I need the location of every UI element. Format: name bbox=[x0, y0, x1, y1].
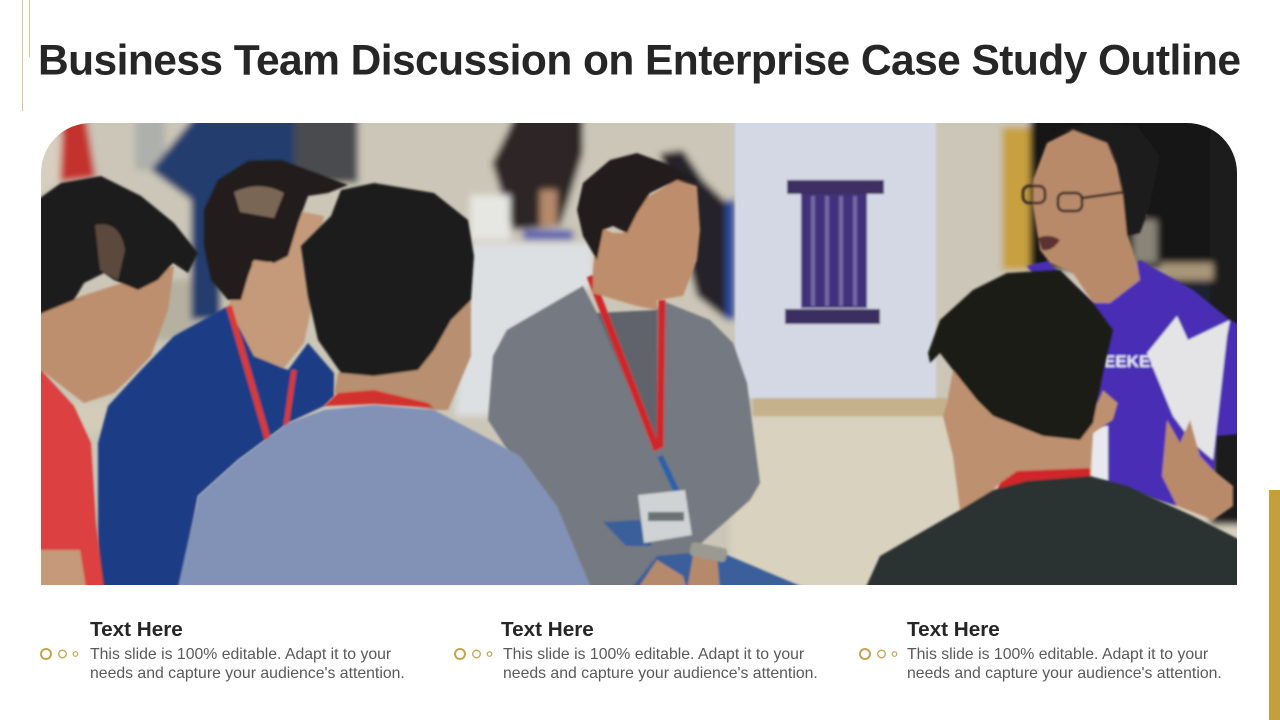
body text 3: This slide is 100% editable. Adapt it to your bbox=[907, 646, 1208, 663]
body text 2: This slide is 100% editable. Adapt it to your bbox=[503, 646, 804, 663]
man in red shirt, far left bbox=[30, 176, 198, 600]
gold accent bar on right edge bbox=[1269, 490, 1280, 720]
man in navy shirt with red lanyard, left bbox=[98, 160, 348, 600]
man with dark hair, black shirt, foreground right bbox=[860, 270, 1250, 600]
heading 3: Text Here bbox=[907, 618, 1000, 641]
body text 2 bbox=[503, 646, 818, 682]
body text 2: needs and capture your audience's attention. bbox=[503, 665, 818, 682]
decorative gold vertical line, short bbox=[29, 0, 30, 57]
photo: team sitting in a discussion circle bbox=[41, 123, 1237, 585]
icon: three dots 1 bbox=[40, 648, 78, 660]
man in grey sweater with red lanyard, centre bbox=[488, 153, 810, 600]
icon: three dots 3 bbox=[859, 648, 898, 660]
icon: three dots 2 bbox=[454, 648, 492, 660]
text block 3 bbox=[859, 618, 1222, 682]
background room bbox=[41, 123, 1237, 585]
man in purple shirt with glasses: EEKER bbox=[1104, 352, 1163, 371]
title: Business Team Discussion on Enterprise Case Study Outline bbox=[38, 38, 1241, 84]
man in light blue shirt, foreground centre bbox=[175, 183, 595, 600]
body text 1: This slide is 100% editable. Adapt it to your bbox=[90, 646, 391, 663]
text block 2 bbox=[454, 618, 818, 682]
man in purple shirt with glasses bbox=[1023, 123, 1250, 520]
body text 1: needs and capture your audience's attention. bbox=[90, 665, 405, 682]
column wall panel bbox=[735, 120, 948, 416]
heading 2: Text Here bbox=[501, 618, 594, 641]
text block 1 bbox=[40, 618, 405, 682]
heading 1: Text Here bbox=[90, 618, 183, 641]
decorative gold vertical line, long bbox=[22, 0, 23, 111]
body text 3 bbox=[907, 646, 1222, 682]
body text 3: needs and capture your audience's attention. bbox=[907, 665, 1222, 682]
body text 1 bbox=[90, 646, 405, 682]
